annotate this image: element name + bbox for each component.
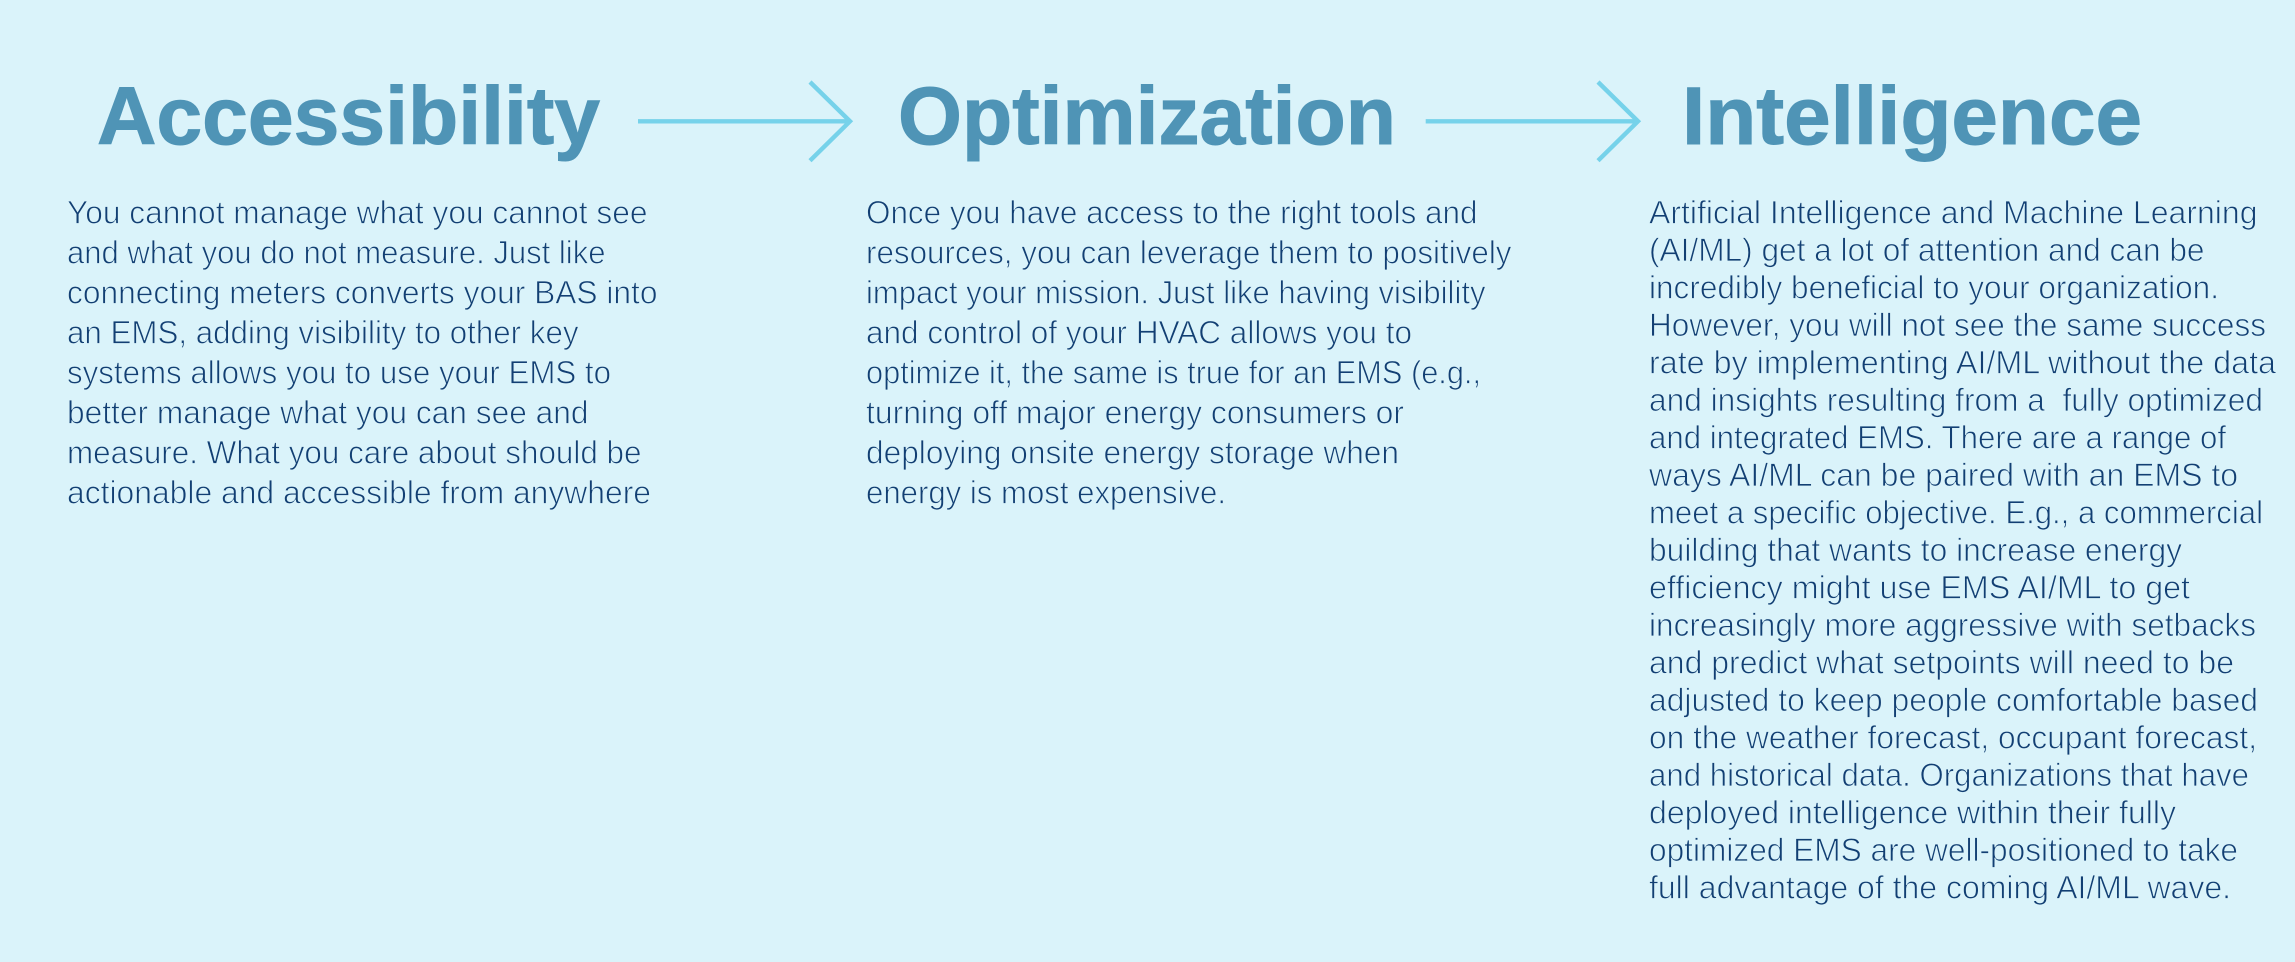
text block: Intelligence description: (AI/ML) get a lot of attention and can be — [1649, 232, 2204, 268]
text block: Optimization description — [866, 194, 1512, 510]
text block: Intelligence description: and insights resulting from a fully optimized — [1649, 382, 2263, 418]
text block: Intelligence description: efficiency might use EMS AI/ML to get — [1649, 569, 2190, 605]
text block: Intelligence description: increasingly more aggressive with setbacks — [1649, 607, 2256, 643]
text block: Intelligence description — [1648, 194, 2276, 905]
text block: Intelligence description: building that wants to increase energy — [1649, 532, 2182, 568]
text block: Accessibility description: connecting meters converts your BAS into — [67, 274, 658, 310]
text block: Accessibility description: systems allows you to use your EMS to — [67, 354, 611, 390]
text block: Optimization description: resources, you can leverage them to positively — [866, 234, 1512, 270]
text block: Intelligence description: However, you will not see the same success — [1649, 307, 2266, 343]
text block: Intelligence description: and integrated EMS. There are a range of — [1649, 419, 2226, 455]
text block: Accessibility description: actionable and accessible from anywhere — [67, 474, 651, 510]
heading: Intelligence: Intelligence — [1682, 71, 2142, 162]
arrow: Accessibility to Optimization — [638, 82, 850, 161]
text block: Accessibility description: better manage what you can see and — [67, 394, 588, 430]
text block: Accessibility description: an EMS, adding visibility to other key — [67, 314, 578, 350]
text block: Accessibility description — [67, 194, 658, 510]
arrow: Optimization to Intelligence — [1426, 82, 1638, 161]
text block: Intelligence description: rate by implementing AI/ML without the data — [1649, 344, 2276, 380]
text block: Optimization description: and control of your HVAC allows you to — [866, 314, 1412, 350]
heading: Optimization: Optimization — [898, 71, 1396, 162]
text block: Intelligence description: and historical data. Organizations that have — [1649, 757, 2249, 793]
text block: Intelligence description: ways AI/ML can be paired with an EMS to — [1648, 457, 2238, 493]
text block: Intelligence description: deployed intelligence within their fully — [1649, 794, 2176, 830]
text block: Intelligence description: full advantage of the coming AI/ML wave. — [1649, 869, 2231, 905]
text block: Accessibility description: measure. What you care about should be — [67, 434, 642, 470]
text block: Optimization description: Once you have access to the right tools and — [866, 194, 1478, 230]
text block: Optimization description: deploying onsite energy storage when — [866, 434, 1399, 470]
text block: Intelligence description: optimized EMS are well-positioned to take — [1649, 832, 2238, 868]
text block: Optimization description: turning off major energy consumers or — [866, 394, 1404, 430]
text block: Accessibility description: and what you do not measure. Just like — [67, 234, 606, 270]
text block: Optimization description: impact your mission. Just like having visibility — [866, 274, 1486, 310]
text block: Intelligence description: Artificial Intelligence and Machine Learning — [1649, 194, 2258, 230]
text block: Intelligence description: adjusted to keep people comfortable based — [1649, 682, 2258, 718]
text block: Accessibility description: You cannot manage what you cannot see — [67, 194, 648, 230]
heading: Accessibility: Accessibility — [97, 71, 600, 162]
text block: Optimization description: optimize it, the same is true for an EMS (e.g., — [866, 354, 1481, 390]
text block: Intelligence description: incredibly beneficial to your organization. — [1649, 269, 2219, 305]
text block: Intelligence description: meet a specific objective. E.g., a commercial — [1649, 494, 2263, 530]
text block: Intelligence description: and predict what setpoints will need to be — [1649, 644, 2234, 680]
text block: Intelligence description: on the weather forecast, occupant forecast, — [1649, 719, 2257, 755]
text block: Optimization description: energy is most expensive. — [866, 474, 1226, 510]
